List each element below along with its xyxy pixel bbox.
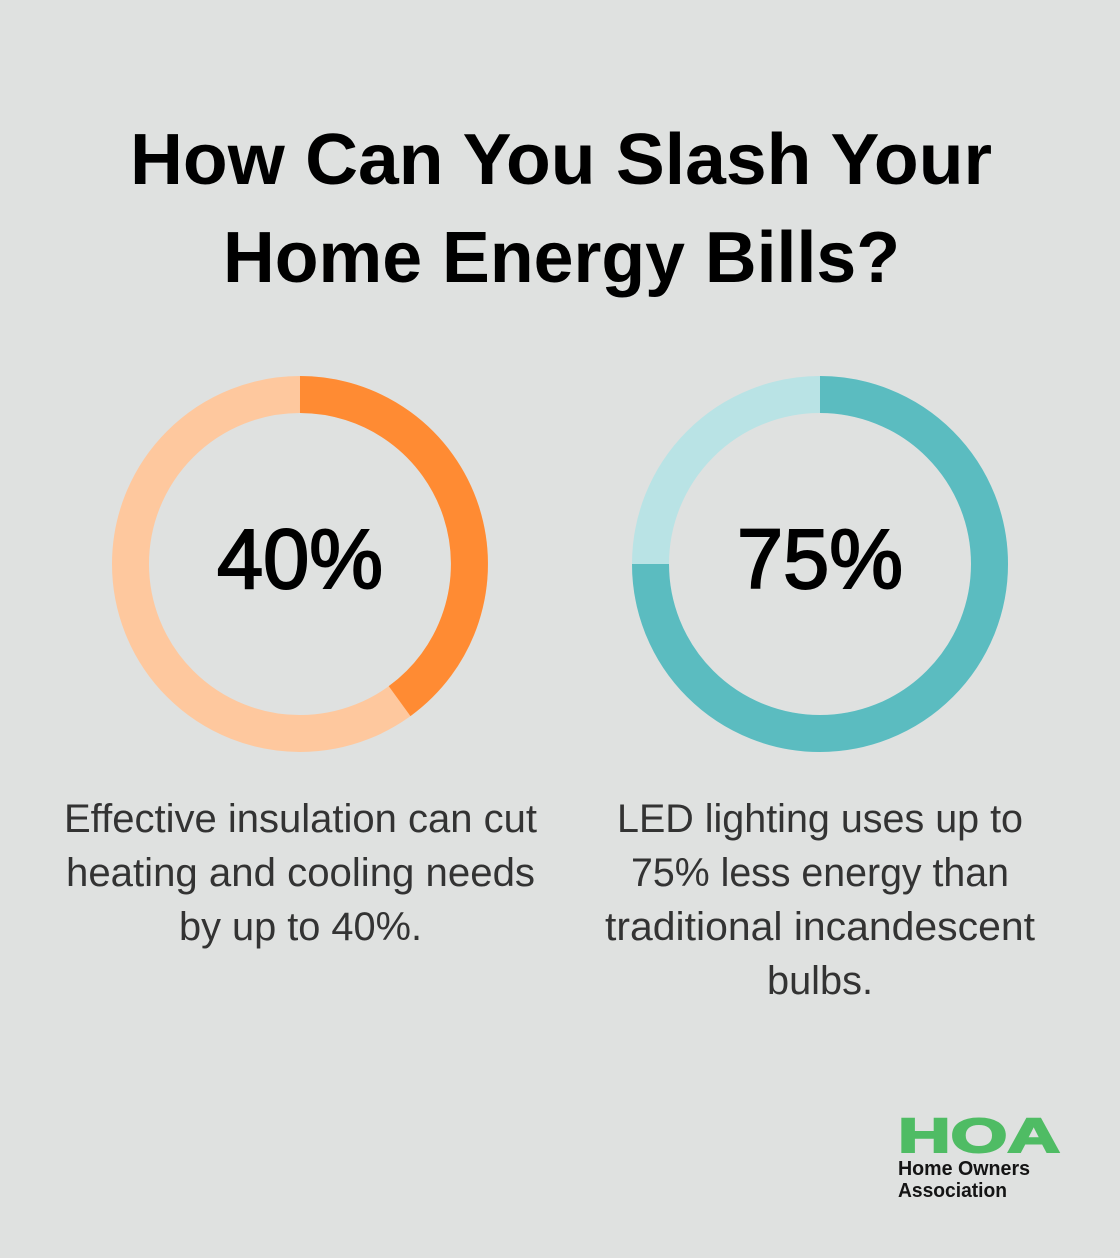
logo: Home Owners Association: HOA [898, 1110, 1060, 1163]
description: insulation [64, 797, 537, 949]
description: LED lighting: traditional incandescent [605, 905, 1035, 949]
value: 75%: 75% [737, 512, 903, 606]
description: LED lighting [605, 797, 1035, 1003]
title: Home Energy Bills? [223, 218, 900, 298]
title: How Can You Slash Your [130, 120, 992, 200]
description: insulation: heating and cooling needs [66, 851, 535, 895]
logo: Home Owners Association: Home Owners [898, 1158, 1030, 1180]
donut chart: 75% [650, 394, 990, 734]
description: LED lighting: 75% less energy than [631, 851, 1009, 895]
value: 40%: 40% [217, 512, 383, 606]
panel: insulation statistic [64, 394, 537, 949]
description: insulation: by up to 40%. [179, 905, 422, 949]
description: LED lighting: LED lighting uses up to [617, 797, 1023, 841]
description: LED lighting: bulbs. [767, 959, 873, 1003]
panel: LED lighting statistic [605, 394, 1035, 1003]
logo: Home Owners Association: Association [898, 1180, 1007, 1202]
title [130, 120, 992, 298]
description: insulation: Effective insulation can cut [64, 797, 537, 841]
logo: Home Owners Association [898, 1110, 1060, 1202]
donut chart: 40% [130, 394, 470, 734]
